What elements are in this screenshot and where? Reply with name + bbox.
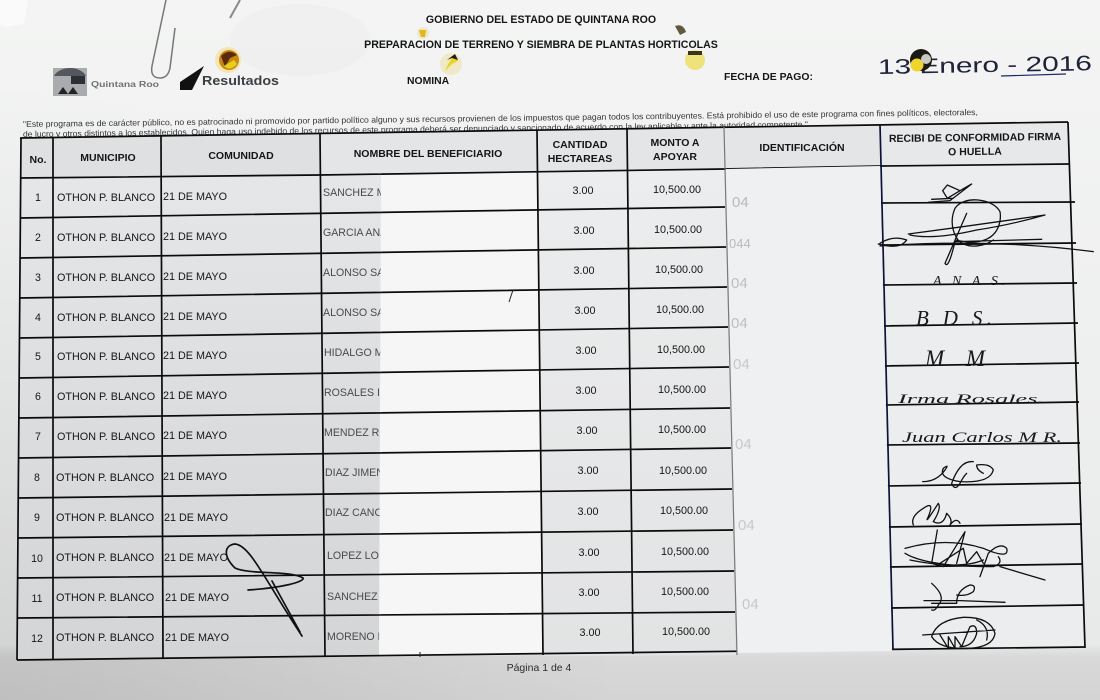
beneficiary names: MENDEZ RO	[324, 427, 388, 439]
beneficiary names: SANCHEZ RO	[327, 591, 396, 603]
pen ticks	[420, 290, 513, 657]
faint handwritten ids: 04	[742, 596, 759, 613]
row numbers: 2	[35, 232, 41, 244]
cantidad hectareas column: 3.00	[576, 425, 598, 437]
monto a apoyar column: 10,500.00	[659, 465, 707, 477]
comunidad column: 21 DE MAYO	[163, 191, 227, 203]
comunidad column	[163, 191, 229, 644]
municipio column: OTHON P. BLANCO	[56, 592, 154, 604]
comunidad column: 21 DE MAYO	[163, 390, 227, 402]
signature 10	[905, 530, 1045, 580]
table column headings: CANTIDAD	[553, 139, 608, 151]
row numbers: 12	[31, 633, 43, 645]
table column headings: RECIBI DE CONFORMIDAD FIRMA	[889, 131, 1061, 145]
monto a apoyar column: 10,500.00	[658, 384, 706, 396]
row numbers: 3	[35, 272, 41, 284]
municipio column: OTHON P. BLANCO	[56, 472, 154, 484]
signature 5: M M: M M	[924, 346, 987, 371]
signature 1	[928, 184, 972, 202]
cantidad hectareas column: 3.00	[575, 345, 597, 357]
monto a apoyar column: 10,500.00	[661, 546, 709, 558]
title: government: GOBIERNO DEL ESTADO DE QUINTANA ROO	[426, 14, 656, 26]
monto a apoyar column: 10,500.00	[654, 224, 702, 236]
disclaimer text: "Este programa es de carácter público, no es patrocinado ni promovido por partido político alguno y sus recursos provienen de los impuestos que pagan todos los contribuyentes. Está prohibido el uso de este programa con fines políticos, electorales,	[23, 107, 978, 129]
redaction patch: names	[379, 172, 543, 656]
signature 7: Juan Carlos M R: Juan Carlos M R.	[902, 430, 1062, 446]
monto a apoyar column: 10,500.00	[657, 344, 705, 356]
paperclip	[152, 0, 240, 78]
signature 4: B D S: B D S.	[916, 306, 992, 330]
signature 11	[924, 583, 1005, 610]
label: nomina: NOMINA	[407, 76, 450, 87]
table column headings	[30, 131, 1061, 166]
comunidad column: 21 DE MAYO	[163, 271, 227, 283]
municipio column: OTHON P. BLANCO	[57, 312, 155, 324]
beneficiary names: MORENO RO	[327, 631, 394, 643]
beneficiary names: ALONSO SA	[323, 307, 385, 319]
comunidad column: 21 DE MAYO	[165, 592, 229, 604]
logo: Resultados	[180, 66, 279, 90]
beneficiary names: SANCHEZ MARIA	[323, 187, 411, 199]
comunidad column: 21 DE MAYO	[163, 471, 227, 483]
row numbers: 8	[34, 472, 40, 484]
beneficiary names: DIAZ CANCHE	[325, 507, 397, 519]
monto a apoyar column: 10,500.00	[655, 264, 703, 276]
signature 3: A N A S: A N A S.	[932, 274, 1005, 289]
table column headings: NOMBRE DEL BENEFICIARIO	[354, 148, 502, 160]
logo: Quintana Roo: Quintana Roo	[91, 80, 159, 89]
comunidad column: 21 DE MAYO	[163, 350, 227, 362]
burn holes	[215, 25, 932, 75]
comunidad column: 21 DE MAYO	[163, 430, 227, 442]
monto a apoyar column: 10,500.00	[658, 424, 706, 436]
logo: Resultados: Resultados	[202, 73, 279, 88]
table grid lines	[17, 122, 1085, 660]
table column headings: IDENTIFICACIÓN	[759, 141, 845, 154]
monto a apoyar column: 10,500.00	[662, 626, 710, 638]
row numbers: 10	[31, 553, 43, 565]
cantidad hectareas column: 3.00	[577, 465, 599, 477]
upper signature scribbles	[878, 184, 1093, 265]
row numbers: 4	[35, 312, 41, 324]
municipio column: OTHON P. BLANCO	[57, 232, 155, 244]
cantidad hectareas column	[572, 185, 601, 639]
stray signature over comunidad	[226, 544, 303, 636]
table column headings: No.	[30, 154, 47, 166]
row numbers: 9	[34, 512, 40, 524]
identificacion column line	[724, 127, 737, 655]
handwritten date: 13 Enero - 2016	[878, 52, 1092, 79]
cantidad hectareas column: 3.00	[573, 265, 595, 277]
faint handwritten ids: 04	[735, 436, 752, 453]
row numbers: 5	[35, 351, 41, 363]
beneficiary names: HIDALGO MA	[324, 347, 391, 359]
comunidad column: 21 DE MAYO	[165, 632, 229, 644]
monto a apoyar column: 10,500.00	[660, 505, 708, 517]
beneficiary names: GARCIA ANA	[323, 227, 388, 239]
table column headings: HECTAREAS	[548, 153, 612, 165]
logo: Quintana Roo	[53, 68, 159, 96]
faint handwritten ids	[729, 194, 759, 613]
cantidad hectareas column: 3.00	[573, 225, 595, 237]
title: program: PREPARACION DE TERRENO Y SIEMBRA DE PLANTAS HORTICOLAS	[364, 39, 718, 51]
faint handwritten ids: 04	[731, 275, 748, 292]
municipio column: OTHON P. BLANCO	[57, 351, 155, 363]
comunidad column: 21 DE MAYO	[164, 512, 228, 524]
monto a apoyar column: 10,500.00	[661, 586, 709, 598]
municipio column: OTHON P. BLANCO	[57, 192, 155, 204]
cantidad hectareas column: 3.00	[578, 587, 600, 599]
table column headings: MONTO A	[650, 137, 700, 149]
comunidad column: 21 DE MAYO	[164, 552, 228, 564]
municipio column: OTHON P. BLANCO	[57, 431, 155, 443]
cantidad hectareas column: 3.00	[578, 547, 600, 559]
beneficiary names: ALONSO SA	[323, 267, 385, 279]
beneficiary names: DIAZ JIMENEZ	[325, 467, 398, 479]
row numbers: 6	[35, 391, 41, 403]
beneficiary names: LOPEZ LOPEZ	[327, 550, 400, 562]
table column headings: MUNICIPIO	[80, 152, 136, 164]
disclaimer text	[23, 107, 978, 139]
faint handwritten ids: 04	[738, 517, 755, 534]
table column headings: APOYAR	[653, 151, 697, 163]
faint handwritten ids: 04	[733, 356, 750, 373]
table fills	[17, 122, 1085, 660]
monto a apoyar column: 10,500.00	[656, 304, 704, 316]
table column headings: COMUNIDAD	[208, 150, 274, 162]
beneficiary names: ROSALES IR	[324, 387, 388, 399]
row numbers	[31, 192, 43, 645]
monto a apoyar column	[653, 184, 710, 638]
row numbers: 1	[35, 192, 41, 204]
faint handwritten ids: 044	[729, 236, 751, 251]
disclaimer text: de lucro y otros distintos a los establecidos. Quien haga uso indebido de los recursos de este programa deberá ser denunciado y sancionado de acuerdo con la ley aplicable y ante la autoridad competente."	[23, 119, 808, 139]
signature 9	[913, 503, 960, 525]
municipio column: OTHON P. BLANCO	[56, 632, 154, 644]
cantidad hectareas column: 3.00	[572, 185, 594, 197]
label: fecha de pago: FECHA DE PAGO:	[724, 72, 813, 83]
municipio column	[56, 192, 155, 644]
cantidad hectareas column: 3.00	[575, 385, 597, 397]
signature 2	[878, 200, 1093, 265]
redaction patch: identificacion	[726, 166, 892, 653]
municipio column: OTHON P. BLANCO	[56, 512, 154, 524]
comunidad column: 21 DE MAYO	[163, 231, 227, 243]
signature 8	[923, 462, 993, 487]
municipio column: OTHON P. BLANCO	[57, 272, 155, 284]
cantidad hectareas column: 3.00	[574, 305, 596, 317]
table column headings: O HUELLA	[948, 146, 1002, 158]
cantidad hectareas column: 3.00	[579, 627, 601, 639]
lower signature scribbles	[905, 462, 1045, 648]
signature 6: Irma Rosales: Irma Rosales.	[896, 391, 1044, 406]
cantidad hectareas column: 3.00	[577, 506, 599, 518]
page number footer: Página 1 de 4	[507, 662, 572, 674]
row numbers: 7	[35, 431, 41, 443]
municipio column: OTHON P. BLANCO	[56, 552, 154, 564]
beneficiary names	[323, 187, 411, 643]
comunidad column: 21 DE MAYO	[163, 311, 227, 323]
signature 12	[923, 617, 995, 648]
faint handwritten ids: 04	[732, 194, 749, 211]
monto a apoyar column: 10,500.00	[653, 184, 701, 196]
municipio column: OTHON P. BLANCO	[57, 391, 155, 403]
faint handwritten ids: 04	[731, 315, 748, 332]
row numbers: 11	[32, 593, 43, 605]
